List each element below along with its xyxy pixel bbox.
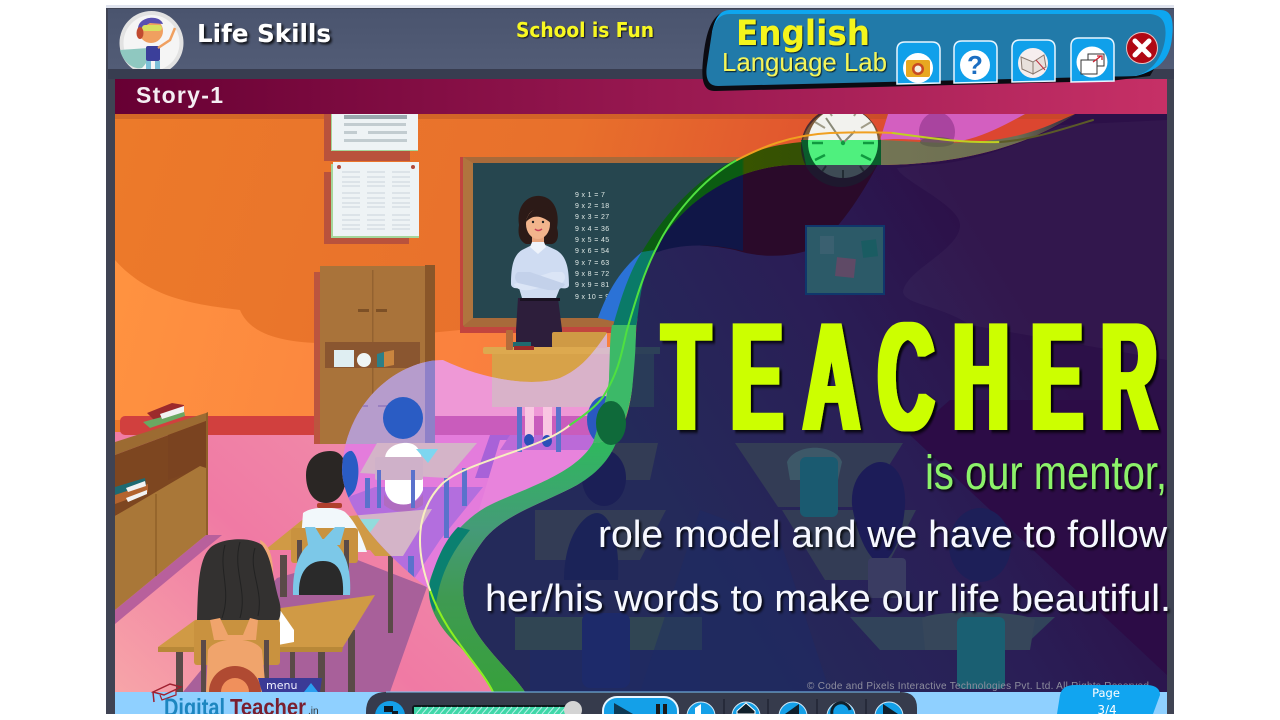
blue lobe edge (598, 252, 642, 322)
icon: bookmark tab (897, 42, 940, 84)
top shadow (115, 114, 1167, 119)
corkboard (805, 225, 885, 295)
multiplication table: 9 x 7 = 63 (575, 260, 609, 267)
pale S ghost (897, 120, 1167, 360)
skirting (120, 416, 620, 435)
story title bar: Story-1 (136, 82, 223, 108)
multiplication table: 9 x 8 = 72 (575, 271, 609, 278)
icon: window tab (1071, 38, 1114, 82)
translucent pink wave (342, 333, 610, 589)
heading: School is Fun: School is Fun (516, 18, 654, 42)
poster one (324, 114, 418, 161)
multiplication table (575, 192, 609, 299)
dark wave panel (450, 114, 1170, 694)
clock (801, 105, 881, 187)
subtitle: is our mentor: is our mentor, (925, 447, 1167, 500)
green band middle (593, 325, 636, 443)
middle student (268, 451, 393, 633)
multiplication table: 9 x 5 = 45 (575, 237, 609, 244)
pink wall patch (880, 114, 1025, 143)
icon: help tab (954, 41, 997, 83)
cupboard (314, 265, 435, 445)
menu tab (258, 678, 322, 692)
ghost desks (515, 443, 1055, 650)
multiplication table: 9 x 9 = 81 (575, 282, 609, 289)
multiplication table: 9 x 1 = 7 (575, 192, 605, 199)
blackboard (460, 157, 750, 333)
panel: English Language Lab (702, 10, 1173, 91)
olive band (880, 114, 1075, 165)
lower right dark floor (910, 400, 1167, 675)
green band top (642, 142, 806, 252)
board under wave (655, 175, 743, 253)
back student under wave (365, 478, 370, 508)
copyright: © Code and Pixels Interactive Technologies Pvt. Ltd. All Rights Reserved. (807, 681, 1152, 692)
icon: replay button (827, 702, 855, 720)
middle student under wave (408, 556, 414, 577)
icon: sitemap button (375, 701, 405, 720)
message line two: her/his words to make our life beautiful. (485, 578, 1171, 620)
ghost floor shadows (654, 617, 702, 650)
title: TEACHER: TEACHER (662, 290, 1157, 463)
icon: close button (1126, 32, 1158, 64)
logo: Digital Teacher: .in (308, 706, 319, 717)
progress bar (412, 701, 582, 719)
cupboard under wave (346, 362, 425, 444)
teacher (511, 196, 569, 350)
ghost teacher desk (635, 347, 660, 354)
logo: Digital Teacher (153, 684, 319, 720)
story title bar (115, 79, 1167, 114)
logo text Language Lab: Language Lab (722, 47, 887, 77)
books on shelf (147, 403, 184, 421)
teacher chair (552, 332, 607, 348)
floor shadow (183, 557, 427, 692)
side shelf (115, 403, 222, 624)
teacher desk (483, 330, 632, 407)
front student (158, 539, 375, 692)
ghost students (564, 448, 1035, 689)
teal band (612, 250, 655, 330)
multiplication table: 9 x 2 = 18 (575, 203, 609, 210)
teacher desk under wave (492, 354, 610, 407)
page indicator: Page (1092, 686, 1120, 700)
header bar (108, 9, 1174, 69)
floor (115, 432, 604, 692)
icon: book tab (1012, 40, 1055, 82)
wavy line (420, 120, 1093, 692)
message line one: role model and we have to follow (598, 514, 1168, 556)
footer bar (115, 692, 1167, 714)
menu tab: menu (266, 679, 297, 692)
icon: help tab: ? (967, 50, 983, 80)
green band lower (429, 440, 617, 692)
avatar icon (120, 11, 184, 75)
icon: play pause pill (603, 697, 678, 720)
classroom scene (115, 105, 1170, 718)
logo: Digital Teacher: Teacher (230, 694, 306, 720)
multiplication table: 9 x 6 = 54 (575, 248, 609, 255)
icon: previous button (779, 702, 807, 720)
multiplication table: 9 x 3 = 27 (575, 214, 609, 221)
player controls (366, 692, 917, 720)
multiplication table: 9 x 10 = 90 (575, 294, 614, 301)
poster two (324, 162, 419, 244)
blue head under wave (587, 396, 606, 440)
heading: Life Skills: Life Skills (197, 19, 331, 48)
logo text English: English (736, 14, 870, 54)
wall (115, 114, 1167, 434)
maroon wall under wave (702, 165, 878, 256)
icon: home button (732, 702, 760, 720)
multiplication table: 9 x 4 = 36 (575, 226, 609, 233)
page indicator: 3/4 (1097, 703, 1117, 717)
icon: next button (875, 702, 903, 720)
icon: sound button (687, 702, 715, 720)
page indicator (1057, 685, 1160, 717)
